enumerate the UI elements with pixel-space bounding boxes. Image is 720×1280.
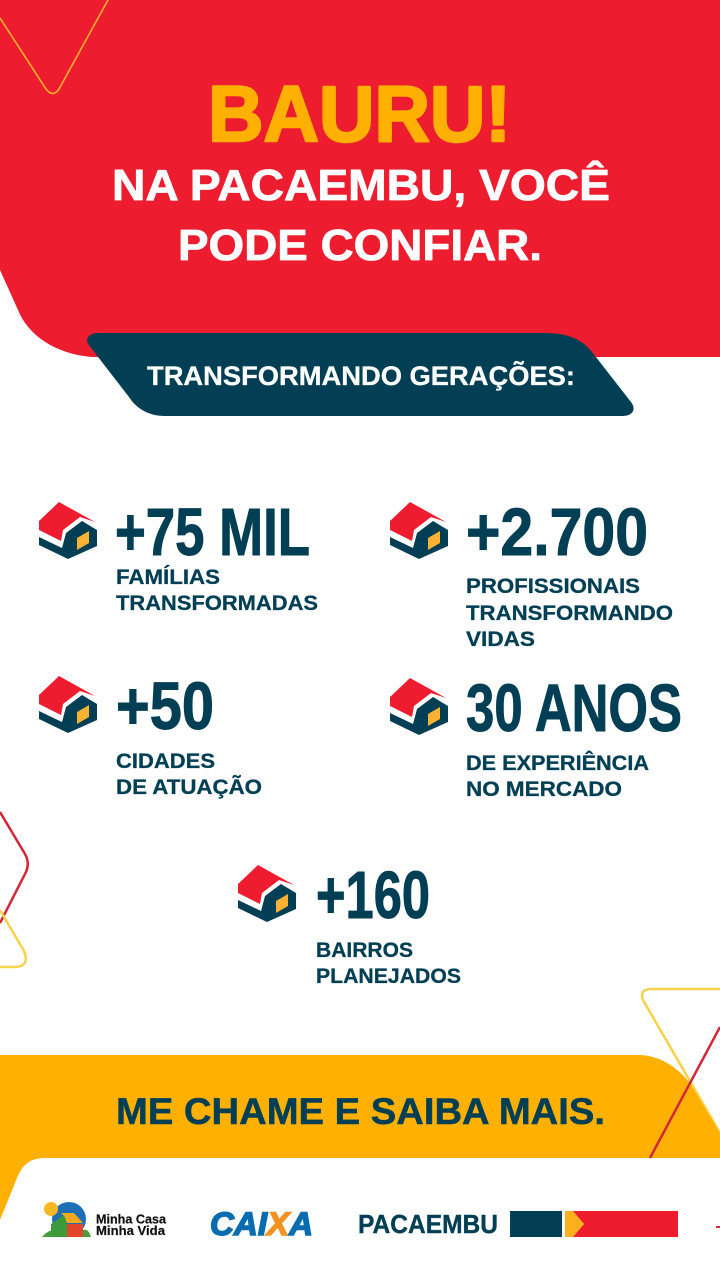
icon: house [39,676,97,733]
heading: trust message [112,160,610,270]
stat: +75 mil famílias: FAMÍLIAS [116,566,220,589]
decorative yellow triangle outline top left [0,0,108,94]
stat: +75 mil famílias [39,495,318,615]
logo: caixa: CAIXA [210,1206,313,1242]
panel: red header background [0,0,720,357]
banner: transformando gerações [87,333,634,416]
stat: +75 mil famílias: +75 MIL [115,495,310,570]
decorative red mark right edge [716,1226,720,1228]
stat: +160 bairros: BAIRROS [316,939,413,962]
logo: pacaembu [358,1209,678,1239]
stat: +50 cidades: CIDADES [116,750,215,773]
icon: house [238,865,296,922]
icon: house [390,502,448,559]
stat: +160 bairros: PLANEJADOS [316,965,461,988]
stat: 30 anos de experiência [390,671,682,801]
decorative red line right edge [650,1027,720,1158]
logo: pacaembu: PACAEMBU [358,1209,498,1239]
heading: trust message: NA PACAEMBU, VOCÊ [112,160,610,210]
logo: minha casa minha vida: Minha Casa [96,1212,167,1226]
logo: minha casa minha vida: Minha Vida [96,1224,166,1238]
heading: trust message: PODE CONFIAR. [178,221,542,270]
stat: +160 bairros [238,858,461,988]
stat: +2.700 profissionais: +2.700 [466,495,648,570]
decorative triangles left edge [0,812,28,967]
stat: 30 anos de experiência: NO MERCADO [466,778,622,801]
stat: +2.700 profissionais: PROFISSIONAIS [466,575,640,598]
stat: 30 anos de experiência: DE EXPERIÊNCIA [466,751,649,775]
logo: minha casa minha vida [42,1202,167,1238]
title: city: BAURU! [208,69,511,158]
decorative yellow triangle right edge [642,989,720,1133]
icon: house [39,502,97,559]
stat: +50 cidades: DE ATUAÇÃO [116,776,262,799]
icon: house [390,678,448,735]
panel: yellow call to action band: ME CHAME E SAIBA MAIS. [116,1091,605,1132]
stat: +2.700 profissionais [390,495,673,651]
stat: +50 cidades [39,669,262,799]
stat: +160 bairros: +160 [316,858,430,933]
stat: +2.700 profissionais: VIDAS [466,628,535,651]
stat: +2.700 profissionais: TRANSFORMANDO [466,602,673,625]
banner: transformando gerações: TRANSFORMANDO GERAÇÕES: [147,360,575,391]
stat: +50 cidades: +50 [116,669,214,744]
panel: yellow call to action band [0,1055,720,1220]
stat: +75 mil famílias: TRANSFORMADAS [116,592,318,615]
